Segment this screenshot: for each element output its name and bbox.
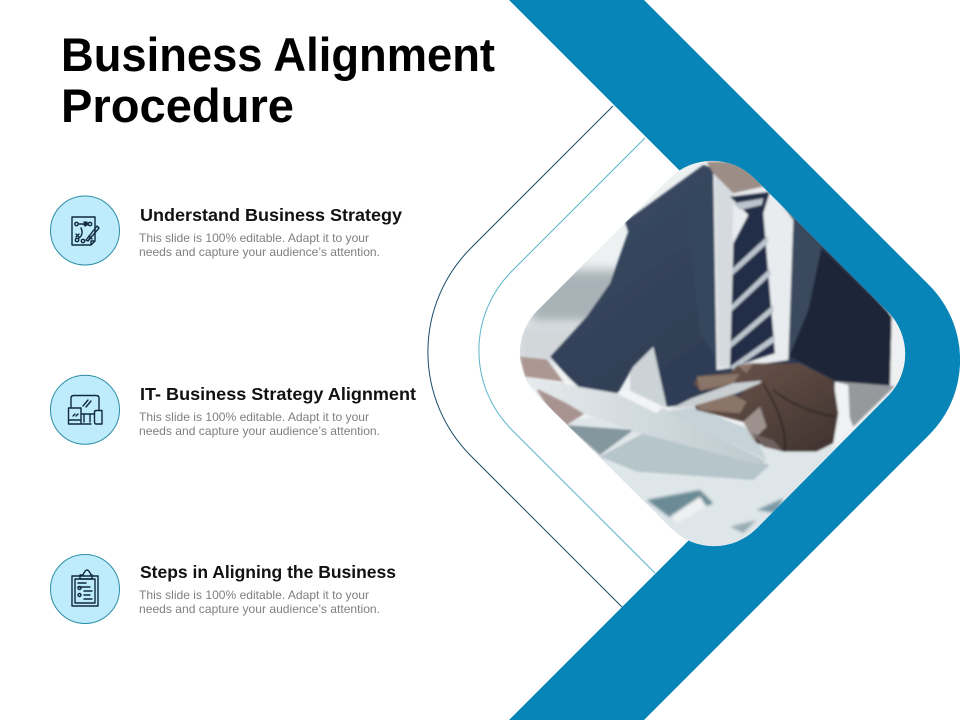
shirt bbox=[713, 173, 793, 370]
striped tie bbox=[730, 192, 775, 370]
description: This slide is 100% editable. Adapt it to your bbox=[139, 231, 369, 245]
title bbox=[61, 28, 495, 132]
description bbox=[139, 410, 380, 438]
neck bbox=[707, 162, 763, 193]
photo: businessman using a tablet bbox=[520, 160, 906, 546]
left hand fingers below tablet bbox=[537, 383, 585, 425]
sleeve grey bbox=[838, 382, 895, 427]
left shirt cuff bbox=[558, 366, 580, 388]
papers on table bbox=[647, 490, 783, 533]
jacket right side bbox=[790, 248, 892, 384]
blue chevron band bbox=[509, 0, 960, 720]
table surface bbox=[567, 410, 837, 560]
item 3: steps in aligning the business bbox=[50, 554, 396, 624]
item 1: understand business strategy bbox=[50, 196, 402, 265]
description: needs and capture your audience’s attention. bbox=[139, 245, 380, 259]
heading: IT- Business Strategy Alignment bbox=[140, 384, 416, 404]
silver pen bbox=[669, 381, 762, 409]
left lapel bbox=[704, 332, 714, 352]
photo background: blurred building bbox=[530, 270, 633, 323]
shirt cuff bbox=[832, 382, 850, 448]
inner teal chevron line bbox=[479, 138, 655, 573]
description: This slide is 100% editable. Adapt it to your bbox=[139, 588, 369, 602]
suit jacket bbox=[550, 165, 892, 407]
tablet bbox=[524, 377, 767, 464]
description bbox=[139, 231, 380, 259]
icon: devices bbox=[50, 375, 120, 444]
description bbox=[139, 588, 380, 616]
left thumb above tablet bbox=[520, 357, 563, 382]
description: This slide is 100% editable. Adapt it to your bbox=[139, 410, 369, 424]
title: Procedure bbox=[61, 79, 294, 132]
heading: Steps in Aligning the Business bbox=[140, 562, 396, 582]
icon: strategy plan bbox=[50, 196, 120, 265]
heading: Understand Business Strategy bbox=[140, 205, 402, 225]
item 2: IT business strategy alignment bbox=[50, 375, 416, 444]
description: needs and capture your audience’s attention. bbox=[139, 602, 380, 616]
icon: clipboard checklist bbox=[50, 554, 120, 624]
hand holding pen bbox=[693, 363, 838, 452]
title: Business Alignment bbox=[61, 28, 495, 81]
description: needs and capture your audience’s attention. bbox=[139, 424, 380, 438]
right lapel bbox=[788, 217, 822, 358]
outer dark chevron line bbox=[428, 106, 622, 607]
tablet screen area to the right bbox=[667, 407, 767, 460]
